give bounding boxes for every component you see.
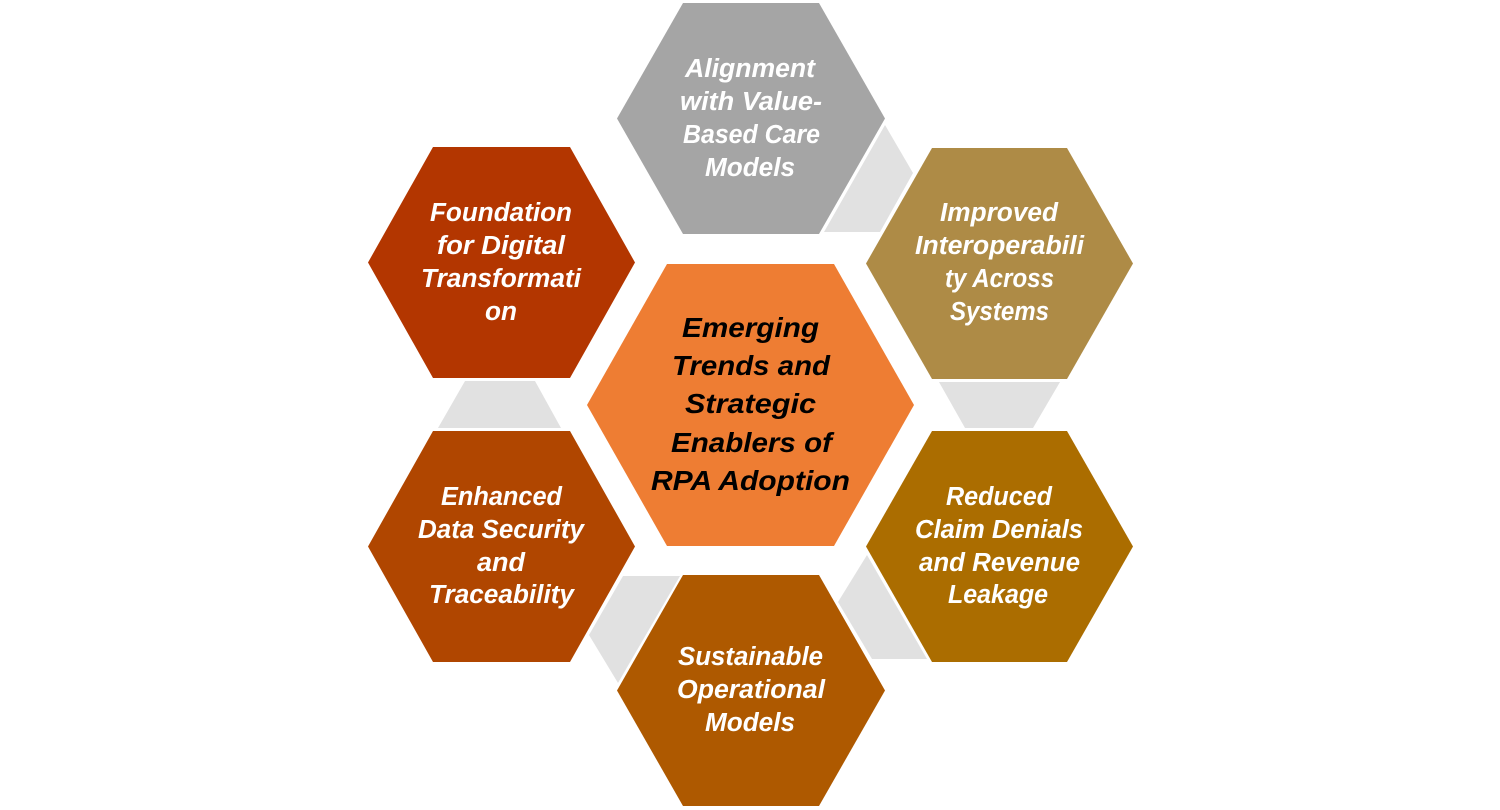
central hexagon: Emerging Trends and Strategic Enablers of RPA Adoption: Trends and bbox=[672, 350, 831, 381]
hexagon: Alignment with Value-Based Care Models: Alignment bbox=[684, 55, 817, 83]
hexagon: Sustainable Operational Models: Models bbox=[705, 709, 795, 737]
hexagon: Reduced Claim Denials and Revenue Leakage: Leakage bbox=[948, 581, 1048, 609]
hexagon: Sustainable Operational Models: Operational bbox=[677, 676, 826, 704]
connector: lower left to upper left bbox=[438, 381, 561, 428]
hexagon: Improved Interoperability Across Systems: ty Across bbox=[945, 265, 1054, 293]
hexagon: Alignment with Value-Based Care Models: Based Care bbox=[683, 121, 820, 149]
hexagon: Reduced Claim Denials and Revenue Leakage: Reduced bbox=[946, 483, 1053, 511]
hexagon: Improved Interoperability Across Systems: Improved bbox=[940, 199, 1059, 227]
hexagon: Enhanced Data Security and Traceability: and bbox=[477, 549, 526, 577]
connector: top to upper right bbox=[824, 125, 913, 232]
hexagon: Improved Interoperability Across Systems: Interoperabili bbox=[915, 232, 1085, 260]
central hexagon: Emerging Trends and Strategic Enablers of RPA Adoption: Emerging bbox=[682, 312, 819, 343]
hexagon: Reduced Claim Denials and Revenue Leakage: and Revenue bbox=[919, 549, 1080, 577]
central hexagon: Emerging Trends and Strategic Enablers of RPA Adoption: Strategic bbox=[685, 388, 816, 419]
hexagon: Reduced Claim Denials and Revenue Leakage bbox=[866, 431, 1133, 662]
hexagon: Enhanced Data Security and Traceability: Enhanced bbox=[441, 483, 563, 511]
central hexagon: Emerging Trends and Strategic Enablers of RPA Adoption: Enablers of bbox=[671, 427, 835, 458]
hexagon: Enhanced Data Security and Traceability: Data Security bbox=[418, 516, 586, 544]
hexagon: Alignment with Value-Based Care Models: with Value- bbox=[680, 88, 822, 116]
hexagon: Reduced Claim Denials and Revenue Leakage: Claim Denials bbox=[915, 516, 1083, 544]
central hexagon: Emerging Trends and Strategic Enablers of RPA Adoption bbox=[587, 264, 914, 546]
hexagon: Improved Interoperability Across Systems bbox=[866, 148, 1133, 379]
central hexagon: Emerging Trends and Strategic Enablers of RPA Adoption: RPA Adoption bbox=[651, 465, 850, 496]
hexagon: Alignment with Value-Based Care Models bbox=[617, 3, 885, 234]
hexagon: Foundation for Digital Transformation: Transformati bbox=[421, 265, 582, 293]
connector: upper right to lower right bbox=[939, 382, 1060, 428]
hexagon: Alignment with Value-Based Care Models: Models bbox=[705, 154, 795, 182]
hexagon: Foundation for Digital Transformation bbox=[368, 147, 635, 378]
hexagon: Enhanced Data Security and Traceability bbox=[368, 431, 635, 662]
hexagon: Sustainable Operational Models bbox=[617, 575, 885, 806]
hexagon: Foundation for Digital Transformation: on bbox=[485, 298, 517, 326]
connector: lower right to bottom bbox=[838, 555, 927, 659]
hexagon: Enhanced Data Security and Traceability: Traceability bbox=[429, 581, 576, 609]
hexagon: Foundation for Digital Transformation: Foundation bbox=[430, 199, 572, 227]
hexagon: Sustainable Operational Models: Sustainable bbox=[678, 643, 823, 671]
hexagon: Foundation for Digital Transformation: for Digital bbox=[437, 232, 566, 260]
hexagon: Improved Interoperability Across Systems: Systems bbox=[950, 298, 1049, 326]
connector: bottom to lower left bbox=[589, 576, 680, 683]
